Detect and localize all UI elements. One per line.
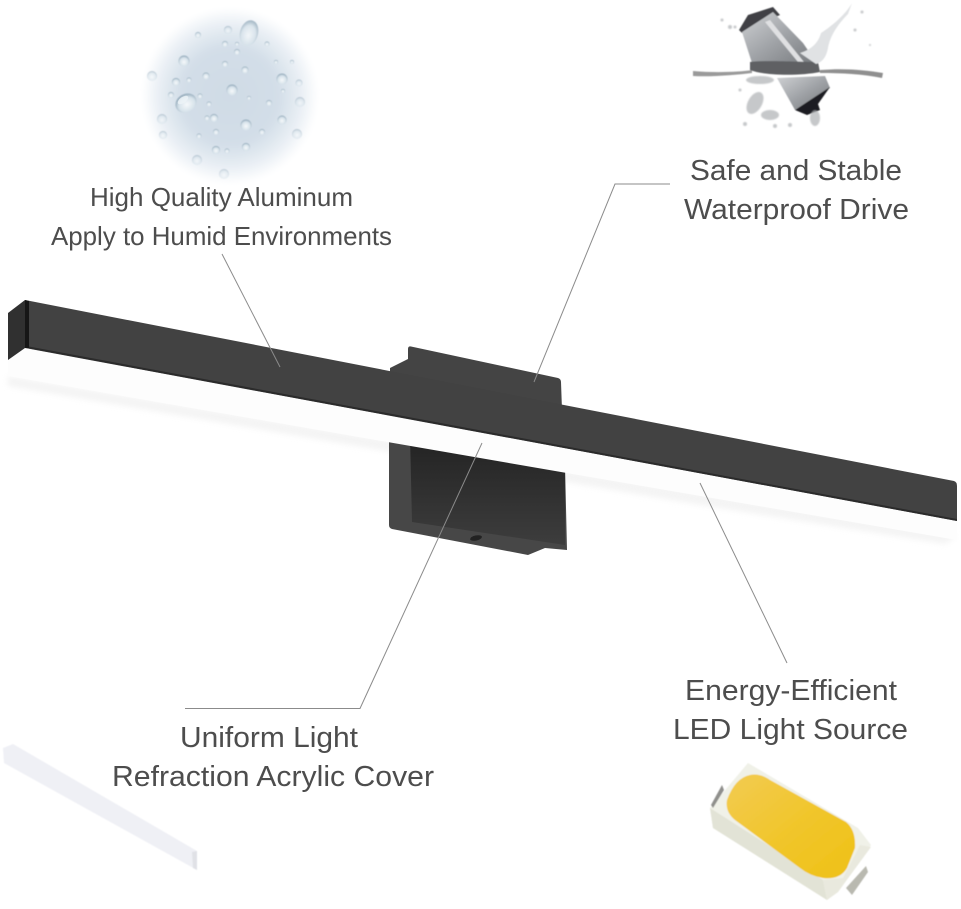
icon: waterproof driver in water [693,3,883,128]
heading: uniform light [112,722,434,793]
callout line: led [700,483,787,663]
diffuser soft shadow [8,376,957,544]
heading: waterproof drive [684,155,909,226]
black aluminum bar [8,300,957,521]
heading: high quality aluminum: High Quality Aluminum [90,182,353,212]
heading: high quality aluminum: Apply to Humid Environments [51,221,392,251]
icon: water droplets [142,8,318,184]
heading: led source [673,675,908,746]
upper mounting plate [390,346,562,410]
callout line: acrylic cover [185,443,482,708]
acrylic diffuser [8,345,957,540]
heading: waterproof drive: Waterproof Drive [684,194,909,226]
heading: uniform light: Uniform Light [180,722,358,754]
icon: acrylic cover strip [3,744,197,870]
heading: led source: Energy-Efficient [685,675,897,707]
lamp illustration [8,300,957,555]
heading: waterproof drive: Safe and Stable [690,155,902,187]
heading: led source: LED Light Source [673,714,908,746]
icon: led chip [710,763,871,900]
heading: uniform light: Refraction Acrylic Cover [112,761,434,793]
lower mounting bracket [389,430,567,555]
callout line: aluminum [222,254,280,367]
callout line: drive [534,184,670,382]
heading: high quality aluminum [51,182,392,251]
